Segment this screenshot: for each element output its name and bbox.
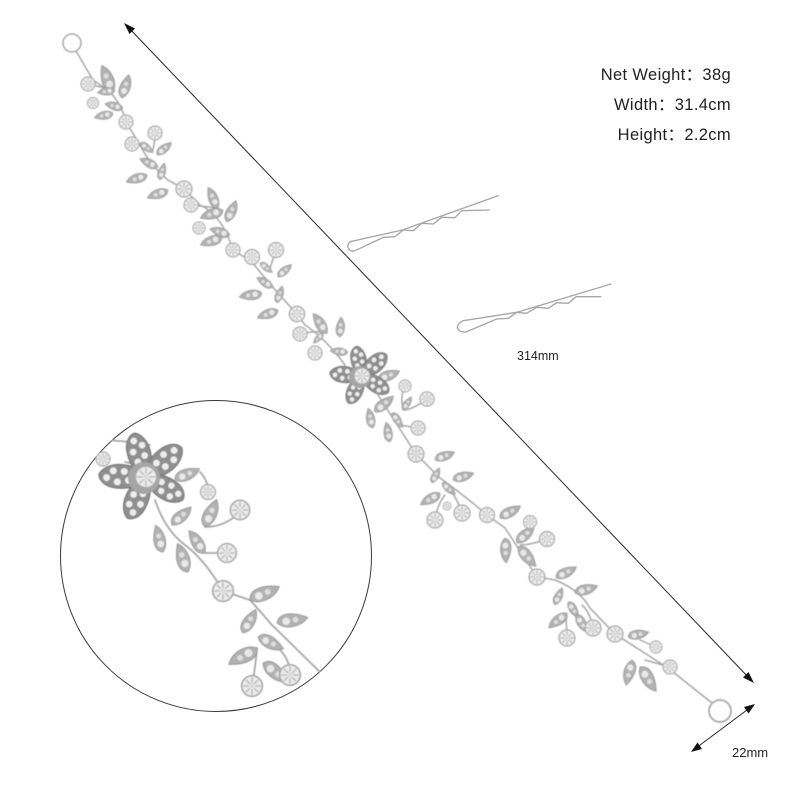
round rhinestones xyxy=(81,77,677,674)
width: Width：31.4cm xyxy=(614,96,731,114)
vine wire and end loops xyxy=(63,34,731,722)
height: Height：2.2cm xyxy=(618,126,731,144)
leaf clusters xyxy=(93,63,661,695)
width label: 22mm xyxy=(732,745,768,760)
length label: 314mm xyxy=(517,349,559,363)
hair vine jewelry, full length xyxy=(63,34,731,722)
bobby pin, upper xyxy=(348,196,498,251)
specifications text block xyxy=(601,66,731,144)
magnified jewelry xyxy=(96,430,320,696)
bobby pin, lower xyxy=(457,284,611,332)
length arrow: 314mm xyxy=(124,23,754,683)
width arrow: 22mm xyxy=(691,704,755,752)
flower centerpiece xyxy=(329,345,393,407)
net weight: Net Weight：38g xyxy=(601,66,731,84)
magnified detail circle xyxy=(60,400,372,712)
